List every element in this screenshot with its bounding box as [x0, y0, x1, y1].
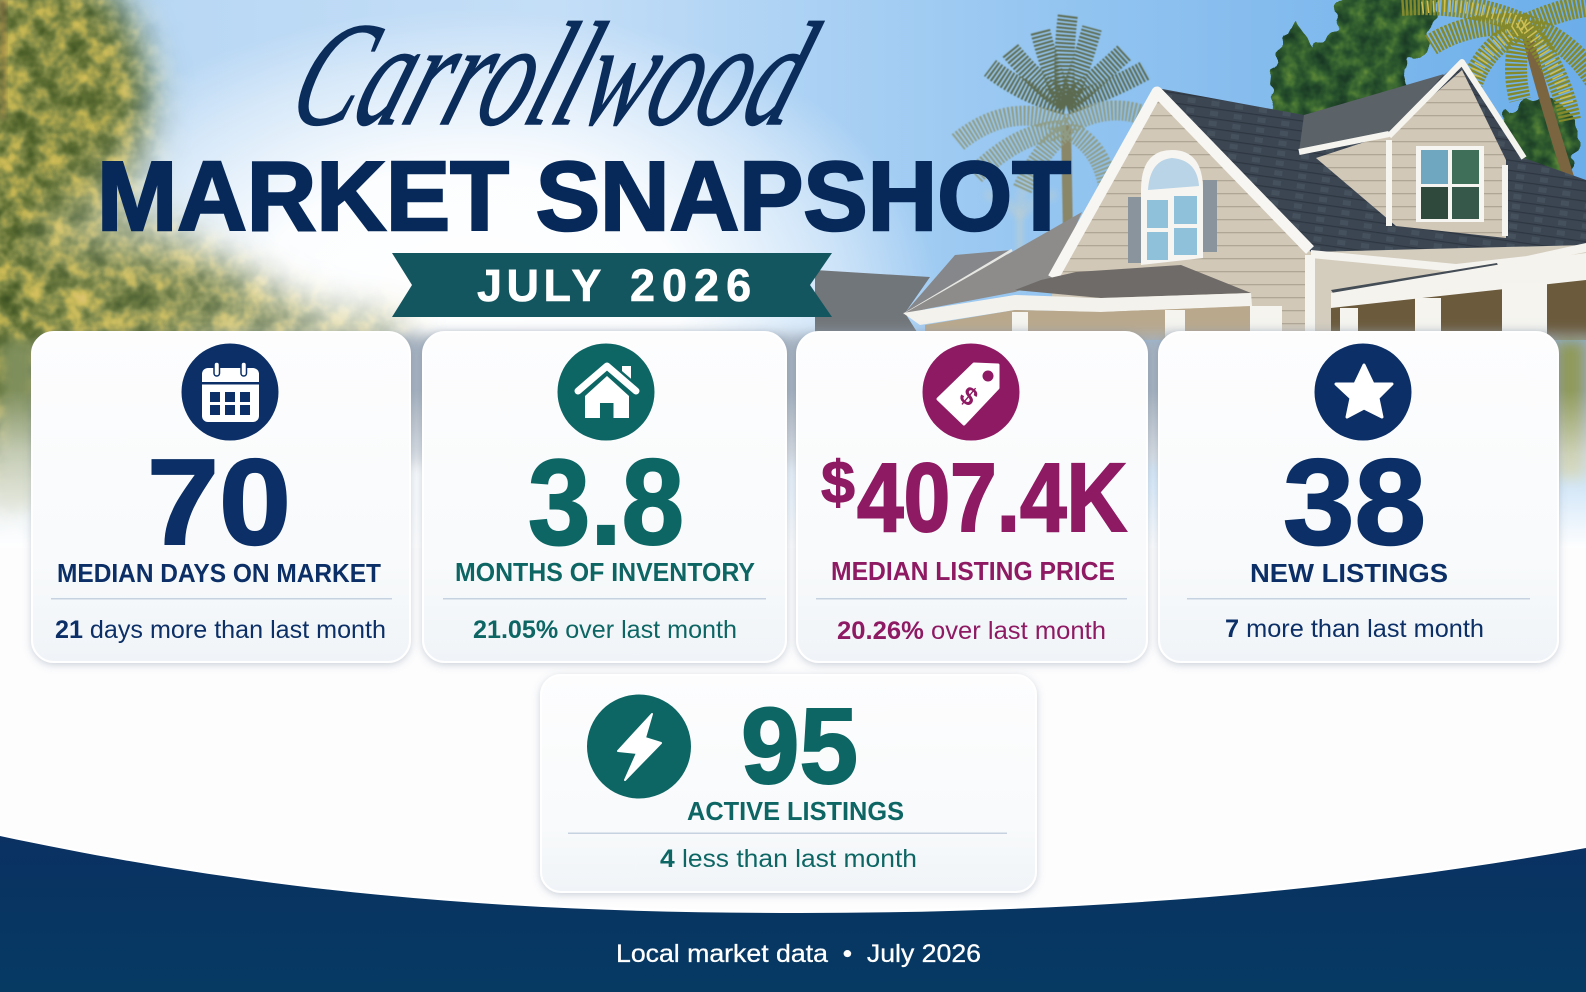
house: dormer trim	[1299, 62, 1524, 236]
change note: 4 less than last month	[660, 845, 917, 873]
value: 95	[741, 685, 858, 806]
panel: active listings	[541, 675, 1036, 892]
date ribbon	[392, 253, 832, 317]
panel: median listing price	[797, 332, 1147, 662]
label: ACTIVE LISTINGS	[687, 796, 904, 826]
icon: lightning bolt	[587, 694, 691, 798]
house: right porch beam	[1331, 253, 1586, 308]
icon: house	[558, 344, 654, 440]
house: right side wall	[1311, 245, 1586, 340]
card	[423, 332, 786, 662]
house: right porch interior	[1331, 278, 1586, 340]
center palm tree	[958, 14, 1150, 235]
house: lower porch interior	[925, 306, 1252, 340]
icon: star	[1314, 344, 1412, 440]
white fade into page	[0, 390, 1586, 550]
house: dormer window	[1416, 146, 1484, 222]
label: MEDIAN DAYS ON MARKET	[57, 558, 381, 588]
house: gable shutters	[1128, 180, 1217, 263]
upper right pine trees and background foliage	[1270, 0, 1580, 172]
house: gable trim	[1053, 92, 1310, 278]
left tree foliage	[0, 0, 230, 521]
distant faded palm	[985, 175, 1058, 290]
footer text: Local market data • July 2026	[616, 940, 981, 968]
value: 407.4K	[857, 443, 1127, 552]
house: columns	[1012, 255, 1547, 343]
background photo: sky, trees and house	[0, 0, 1586, 536]
sky	[0, 0, 1586, 560]
icon: price tag: $	[954, 380, 985, 412]
house: arched gable window	[1141, 150, 1203, 265]
house: front gable wall	[1050, 92, 1311, 340]
house: right porch roof strip	[1331, 263, 1500, 296]
right palm tree	[1400, 4, 1586, 232]
house: dormer wall	[1316, 70, 1506, 238]
value: 3.8	[528, 434, 684, 570]
lower tones at page edges and between cards	[0, 335, 1586, 510]
change note: 7 more than last month	[1225, 615, 1484, 643]
ribbon text: 2026	[630, 260, 758, 311]
card	[797, 332, 1147, 662]
ribbon shape	[392, 253, 832, 317]
change note: 20.26% over last month	[837, 617, 1106, 645]
value: 38	[1283, 434, 1426, 570]
house: porch fascia	[903, 293, 1252, 325]
card	[541, 675, 1036, 892]
footer wave	[0, 834, 1586, 992]
sun glow	[0, 0, 1100, 560]
house: far left roof	[815, 270, 930, 340]
title: MARKET SNAPSHOT: MARKET SNAPSHOT	[97, 141, 1071, 251]
value currency sign: $	[821, 449, 855, 516]
panel: median days on market	[32, 332, 410, 662]
label: MEDIAN LISTING PRICE	[831, 556, 1115, 586]
panel: months of inventory	[423, 332, 786, 662]
card	[32, 332, 410, 662]
left tree trunk	[0, 0, 6, 120]
house: front porch roof	[1015, 265, 1251, 298]
house: left roof slope	[905, 212, 1082, 313]
label: NEW LISTINGS	[1250, 558, 1448, 588]
house: dormer roof	[1299, 74, 1444, 152]
label: MONTHS OF INVENTORY	[455, 557, 755, 587]
house: main roof fascia	[1311, 243, 1586, 272]
value: 70	[147, 434, 291, 570]
front foliage over glow	[0, 0, 424, 344]
change note: 21 days more than last month	[55, 616, 386, 644]
panel: new listings	[1159, 332, 1558, 662]
icon: price tag	[922, 344, 1020, 440]
house: main dark roof	[1157, 60, 1586, 258]
ribbon text: JULY	[477, 260, 622, 311]
card	[1159, 332, 1558, 662]
icon: calendar	[182, 344, 278, 440]
change note: 21.05% over last month	[473, 616, 737, 644]
